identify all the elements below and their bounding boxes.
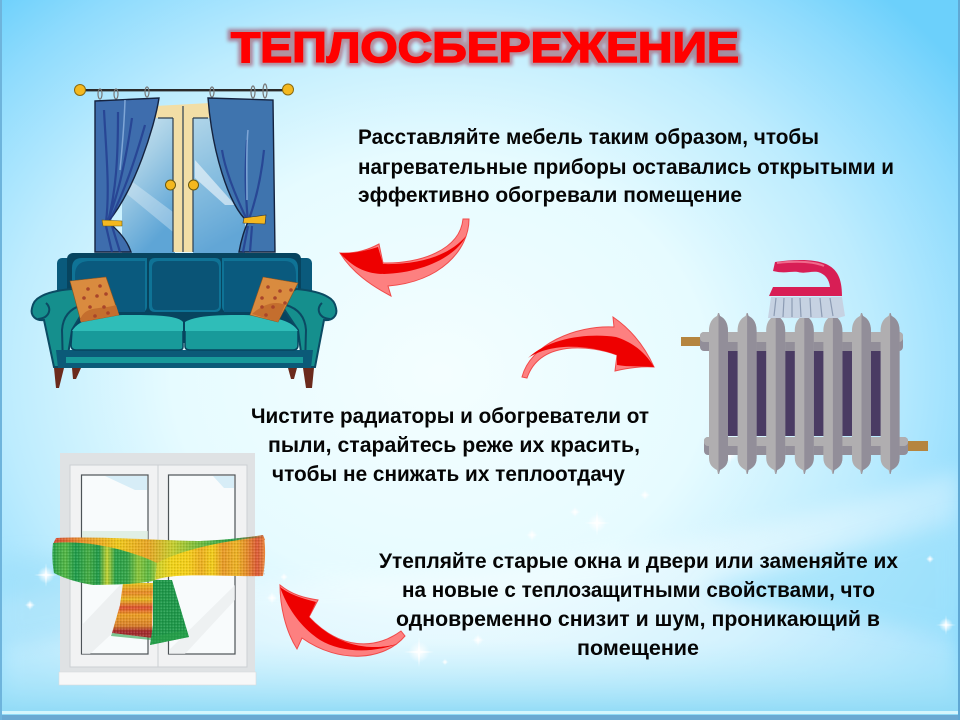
sparkles [24, 443, 956, 667]
sofa legs [54, 368, 314, 388]
arrow: to radiator [522, 317, 654, 378]
window glass [122, 110, 245, 253]
window knobs [166, 180, 198, 190]
text block: windows: на новые с теплозащитными свойствами, что [402, 579, 875, 602]
illustration: window with scarf [52, 453, 265, 685]
radiator panels [725, 351, 885, 436]
sofa seat cushions [71, 315, 298, 350]
text block: furniture: Расставляйте мебель таким образом, чтобы [358, 126, 819, 149]
sofa arms [32, 289, 336, 367]
left pillow [70, 277, 119, 322]
illustration: window with curtains [74, 84, 294, 253]
text block: furniture: нагревательные приборы оставались открытыми и [358, 156, 894, 179]
text block: windows [379, 550, 898, 660]
text block: radiators: чтобы не снижать их теплоотдачу [272, 463, 625, 486]
text block: radiators: Чистите радиаторы и обогреватели от [251, 405, 649, 428]
window frame outer [60, 453, 255, 675]
scarf tails [111, 580, 189, 645]
left curtain [95, 98, 159, 252]
arrow: to sofa [340, 219, 469, 296]
sofa base [56, 350, 313, 368]
text block: furniture: эффективно обогревали помещение [358, 184, 742, 207]
text block: furniture [358, 126, 894, 207]
text block: windows: Утепляйте старые окна и двери или заменяйте их [379, 550, 898, 573]
icon: brush [768, 260, 845, 318]
text block: radiators [251, 405, 649, 486]
curtain rod [74, 84, 294, 99]
title: ТЕПЛОСБЕРЕЖЕНИЕ [231, 24, 739, 72]
radiator columns [709, 313, 900, 474]
window sashes [70, 465, 247, 667]
sofa back [57, 253, 312, 343]
text block: windows: одновременно снизит и шум, проникающий в [396, 608, 880, 631]
illustration: radiator [681, 313, 928, 474]
arrow: to scarf window [280, 585, 405, 656]
scarf band [52, 535, 265, 585]
text block: windows: помещение [577, 637, 699, 660]
text block: radiators: пыли, старайтесь реже их красить, [268, 434, 640, 457]
illustration: sofa [32, 253, 336, 388]
right pillow [250, 277, 298, 322]
radiator headers [700, 332, 908, 455]
window frame [152, 103, 210, 252]
window panes [82, 475, 235, 654]
right curtain [208, 98, 275, 252]
window sill [59, 672, 256, 685]
radiator pipes [681, 337, 928, 451]
